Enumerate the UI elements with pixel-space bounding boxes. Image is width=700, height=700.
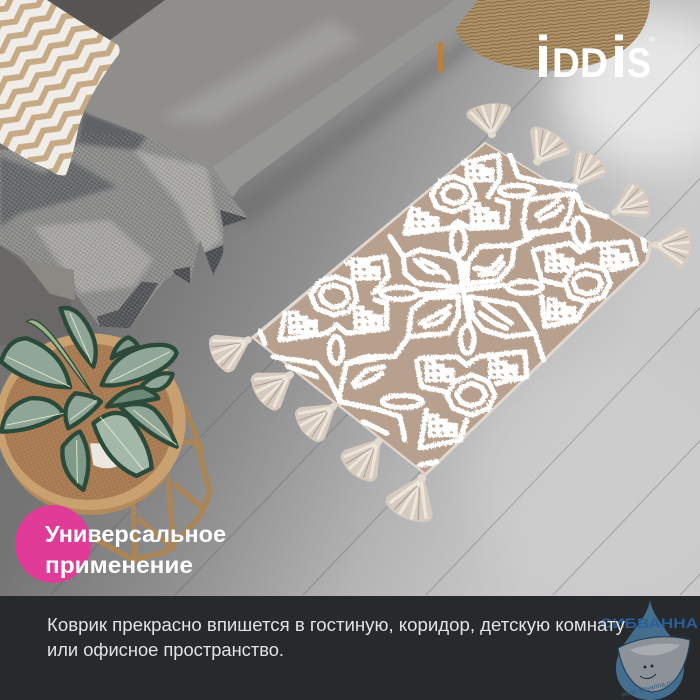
blanket <box>0 112 253 333</box>
stool legs <box>97 407 210 560</box>
logo: iDDiS: i <box>611 25 627 90</box>
cushion <box>0 0 120 175</box>
logo: iDDiS: S <box>627 40 651 87</box>
sofa <box>0 0 525 345</box>
watermark name: СИБВАННА <box>600 615 698 631</box>
logo: iDDiS: i <box>535 25 551 90</box>
leaf veins <box>7 313 177 483</box>
watermark url: www.sibvanna.ru <box>620 679 674 699</box>
logo: iDDiS <box>535 25 655 90</box>
stool seat <box>1 348 181 515</box>
badge heading: применение <box>45 552 193 578</box>
stool <box>0 308 210 560</box>
plant <box>1 308 177 490</box>
pouf <box>438 0 650 72</box>
badge blob <box>15 505 91 583</box>
tassels <box>204 101 692 528</box>
rug base <box>251 142 653 476</box>
bottom panel <box>0 596 700 700</box>
description text: Коврик прекрасно впишется в гостиную, коридор, детскую комнату <box>47 615 625 635</box>
watermark <box>600 600 698 700</box>
badge heading: Универсальное <box>45 521 226 547</box>
pot <box>90 443 120 468</box>
logo: iDDiS: D <box>580 38 608 86</box>
description text: или офисное пространство. <box>47 640 284 660</box>
rug <box>204 101 692 528</box>
rug pattern <box>260 155 645 465</box>
logo: iDDiS: D <box>552 38 580 86</box>
rug key motifs <box>288 159 630 437</box>
